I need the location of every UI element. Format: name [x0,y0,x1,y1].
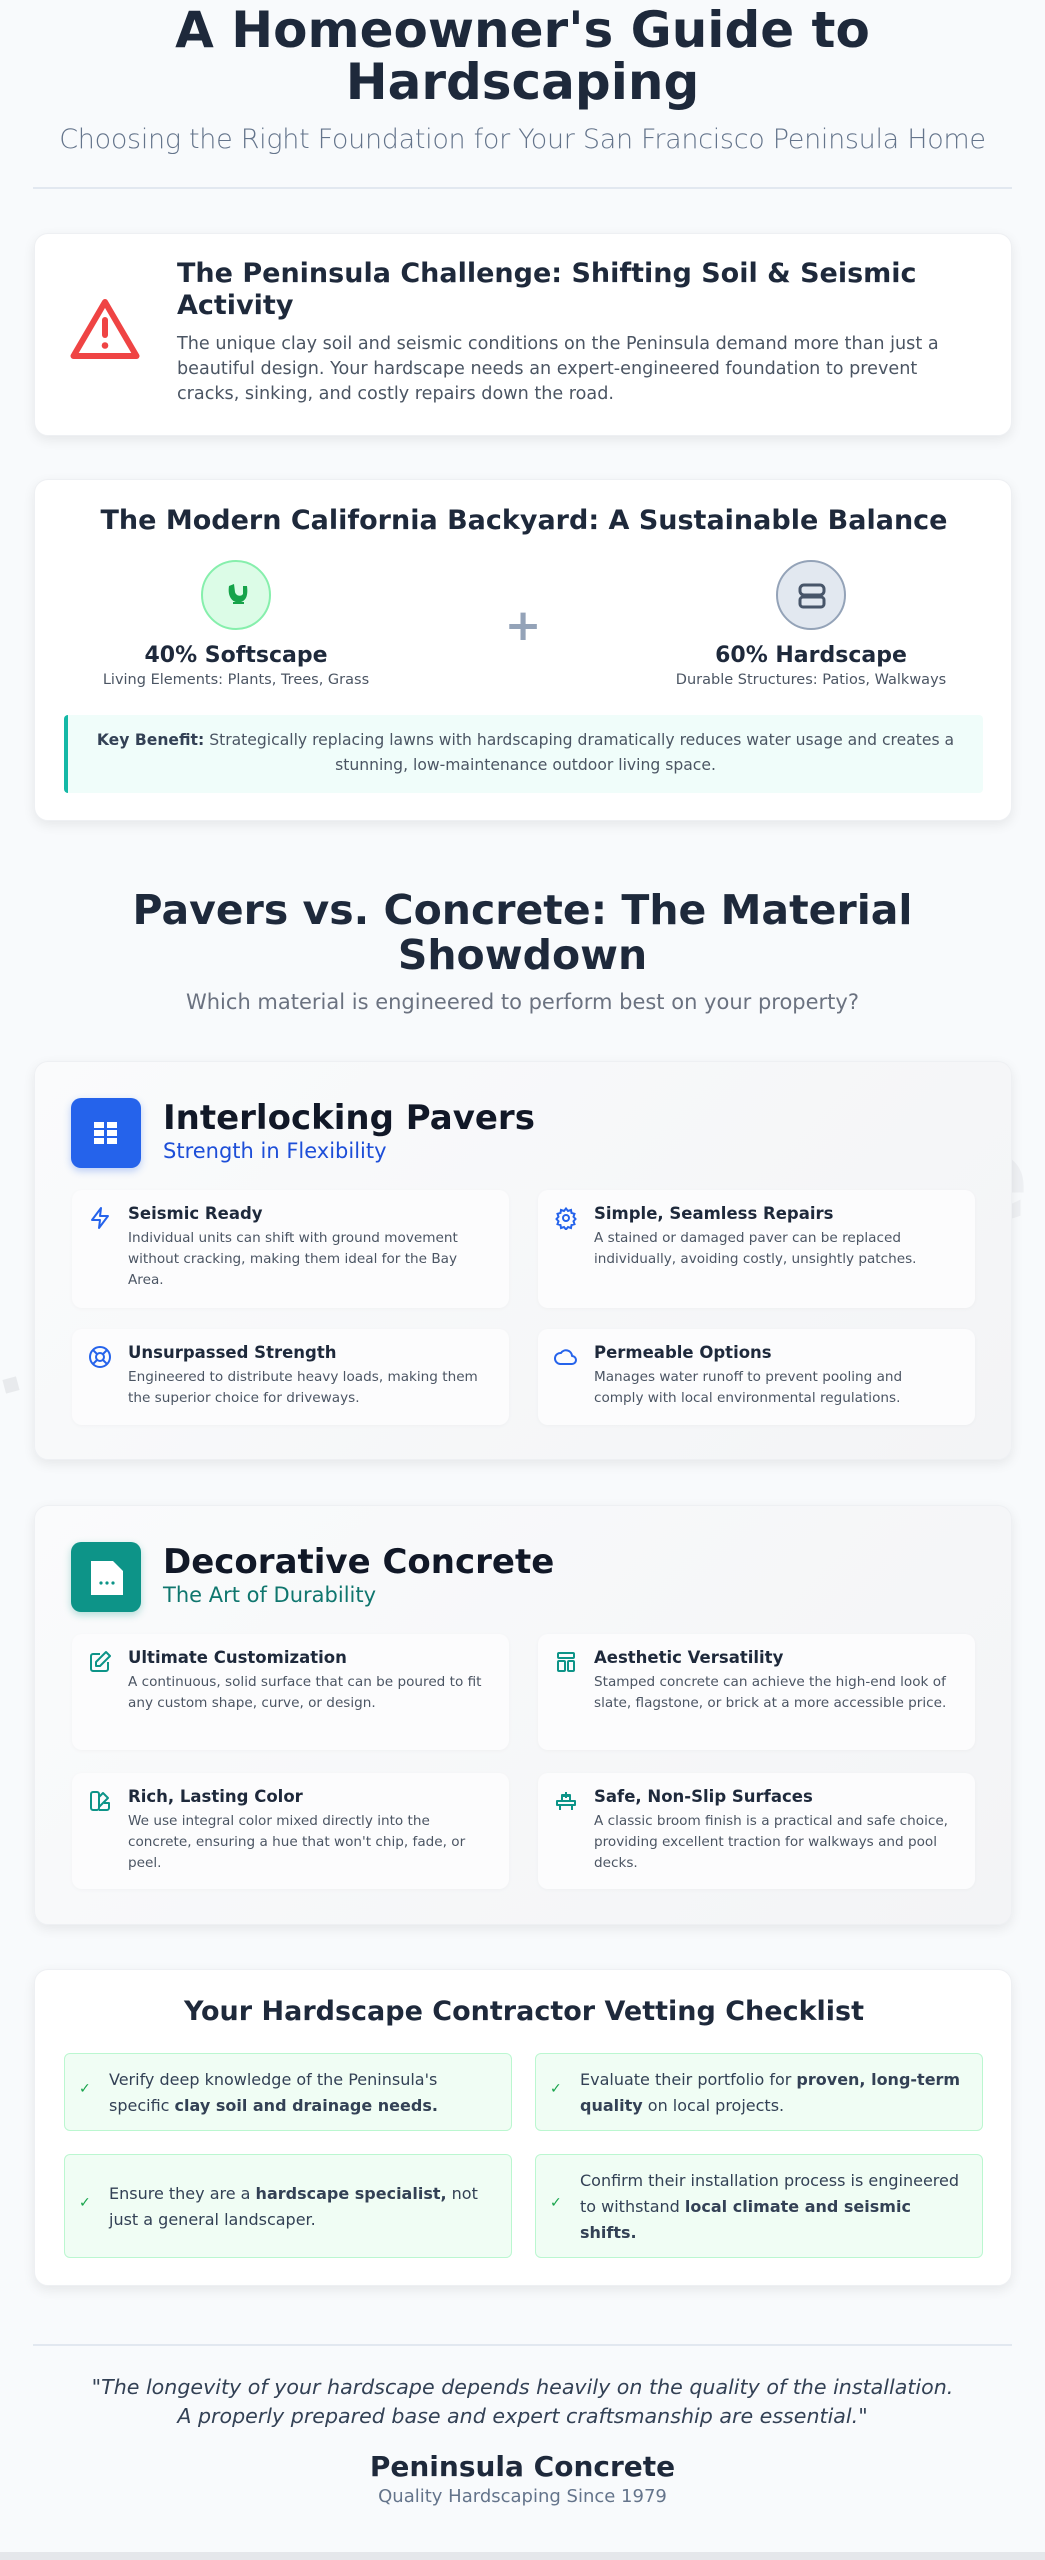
feature: permeable: Manages water runoff to prevent pooling and comply with local environmental regulations. [594,1369,902,1406]
feature: repairs [538,1190,975,1308]
feature: seismic ready: Individual units can shift with ground movement without cracking, making them ideal for the Bay Area. [128,1230,458,1288]
feature: versatility [538,1634,975,1750]
feature: strength: Unsurpassed Strength [128,1343,336,1362]
panel: contractor checklist [34,1969,1012,2286]
checklist item 4: ✓ [550,2195,562,2211]
panel: peninsula challenge [34,233,1012,436]
checklist item 2: Evaluate their portfolio for proven, long-term quality on local projects. [580,2070,960,2115]
feature: strength: Engineered to distribute heavy loads, making them the superior choice for driveways. [128,1369,478,1406]
hardscape: 60% Hardscape [715,643,907,668]
feature: customization: Ultimate Customization [128,1648,347,1667]
checklist item 3 [64,2154,512,2258]
icon: grid [71,1098,141,1168]
feature: seismic ready: Seismic Ready [128,1204,263,1223]
heading: The Modern California Backyard: A Sustainable Balance [100,505,947,536]
panel: sustainable balance [34,479,1012,821]
feature: versatility: Stamped concrete can achieve the high-end look of slate, flagstone, or brick at a more accessible price. [594,1674,946,1711]
checklist item 1: Verify deep knowledge of the Peninsula's specific clay soil and drainage needs. [109,2070,438,2115]
feature: color: Rich, Lasting Color [128,1787,303,1806]
checklist item 3: Ensure they are a hardscape specialist, not just a general landscaper. [109,2184,478,2229]
feature: customization [72,1634,509,1750]
icon: plant [201,560,271,630]
callout: key benefit: Key Benefit: Strategically replacing lawns with hardscaping dramatically reduces water usage and creates a stunning, low-maintenance outdoor living space. [97,731,954,774]
plus sign: + [505,600,541,651]
panel: interlocking pavers [34,1061,1012,1460]
title: A Homeowner's Guide to [175,1,870,59]
heading: Decorative Concrete [163,1542,554,1582]
heading: The Peninsula Challenge: Shifting Soil & Seismic Activity [177,258,917,321]
icon: pavers [776,560,846,630]
quote: A properly prepared base and expert craftsmanship are essential." [177,2404,868,2428]
text block: The unique clay soil and seismic conditions on the Peninsula demand more than just a beautiful design. Your hardscape needs an expert-engineered foundation to prevent cracks, sinking, and costly repairs down the road. [177,334,939,404]
checklist item 4 [535,2154,983,2258]
footer tagline: Quality Hardscaping Since 1979 [378,2486,667,2507]
softscape: Living Elements: Plants, Trees, Grass [103,672,369,688]
subheading: Strength in Flexibility [163,1139,387,1163]
feature: repairs: A stained or damaged paver can be replaced individually, avoiding costly, unsightly patches. [594,1230,916,1267]
checklist item 1: ✓ [79,2081,91,2097]
icon: document [71,1542,141,1612]
heading: Interlocking Pavers [163,1098,535,1138]
feature: color [72,1773,509,1889]
quote: "The longevity of your hardscape depends heavily on the quality of the installation. [92,2375,953,2399]
feature: customization: A continuous, solid surface that can be poured to fit any custom shape, curve, or design. [128,1674,482,1711]
quote [92,2375,953,2428]
softscape: 40% Softscape [144,643,328,668]
callout: key benefit [64,715,983,793]
subheading: The Art of Durability [163,1583,376,1607]
feature: non-slip: A classic broom finish is a practical and safe choice, providing excellent traction for walkways and pool decks. [594,1813,948,1871]
feature: strength [72,1329,509,1425]
panel: decorative concrete [34,1505,1012,1925]
softscape [103,560,369,688]
feature: permeable: Permeable Options [594,1343,772,1362]
checklist item 3: ✓ [79,2195,91,2211]
hardscape [676,560,946,688]
section subtitle: Which material is engineered to perform best on your property? [186,990,859,1014]
feature: seismic ready [72,1190,509,1308]
feature: color: We use integral color mixed directly into the concrete, ensuring a hue that won't chip, fade, or peel. [128,1813,465,1871]
checklist item 2 [535,2053,983,2131]
checklist item 1 [64,2053,512,2131]
feature: versatility: Aesthetic Versatility [594,1648,783,1667]
feature: non-slip: Safe, Non-Slip Surfaces [594,1787,813,1806]
watermark decoration: e [948,1110,1029,1249]
feature: permeable [538,1329,975,1425]
feature: non-slip [538,1773,975,1889]
section heading: showdown: Pavers vs. Concrete: The Material [132,886,912,934]
title [175,1,870,111]
title: Hardscaping [346,53,699,111]
section heading: showdown: Showdown [398,931,647,979]
subtitle: Choosing the Right Foundation for Your San Francisco Peninsula Home [59,124,986,155]
feature: repairs: Simple, Seamless Repairs [594,1204,834,1223]
checklist item 4: Confirm their installation process is engineered to withstand local climate and seismic shifts. [580,2171,959,2242]
section heading: showdown [132,886,912,979]
footer brand: Peninsula Concrete [370,2450,675,2483]
icon: warning triangle [70,299,140,359]
hardscape: Durable Structures: Patios, Walkways [676,672,946,688]
heading: Your Hardscape Contractor Vetting Checklist [184,1996,864,2027]
checklist item 2: ✓ [550,2081,562,2097]
